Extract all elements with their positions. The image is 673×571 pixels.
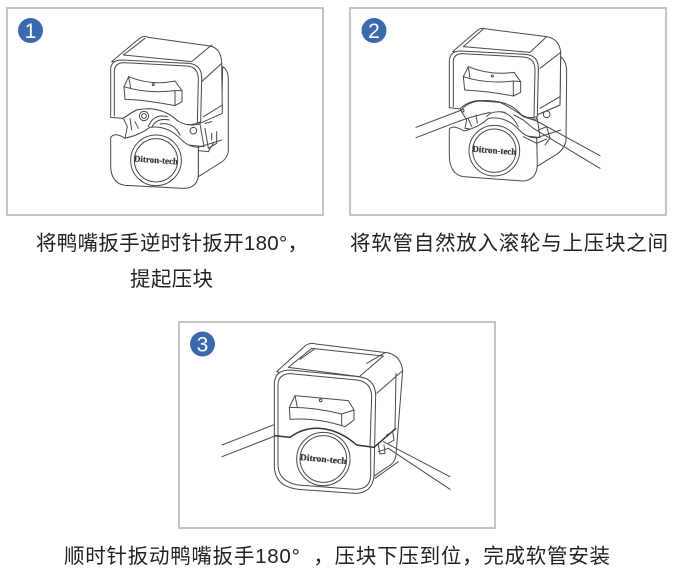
badge 1: 1 [25, 20, 36, 43]
badge 2: 2 [368, 20, 380, 43]
lower cover [111, 127, 222, 188]
dark seam [274, 428, 396, 447]
badge 3 [190, 332, 215, 356]
roller area [460, 101, 550, 145]
outlet port and right tube [375, 432, 450, 489]
handle [124, 77, 182, 106]
pump illustration, closed [222, 343, 450, 493]
pump illustration, tube inserted [416, 28, 600, 181]
caption 3: 顺时针扳动鸭嘴扳手180° ，压块下压到位，完成软管安装 [64, 545, 610, 568]
badge 1 [18, 18, 43, 43]
logo disc [297, 432, 350, 486]
badge 3: 3 [197, 334, 208, 356]
handle [289, 396, 354, 427]
panel 3: closed [179, 322, 495, 528]
panel 1: open lever [7, 8, 323, 215]
lower cover [449, 118, 561, 181]
handle [463, 67, 521, 96]
badge 2 [362, 18, 386, 43]
tube [416, 101, 600, 168]
lower cover: Ditron-tech [472, 144, 517, 157]
caption 2: 将软管自然放入滚轮与上压块之间 [350, 232, 668, 255]
caption 1 [36, 232, 308, 291]
roller area [123, 109, 217, 152]
caption 1: 将鸭嘴扳手逆时针扳开180°， [36, 232, 308, 255]
lower cover: Ditron-tech [134, 153, 178, 167]
logo disc: Ditron-tech [300, 452, 347, 466]
pump illustration, open [111, 37, 228, 188]
tube left [222, 424, 275, 457]
panel 2: insert tube [350, 8, 666, 215]
caption 1: 提起压块 [130, 268, 213, 291]
